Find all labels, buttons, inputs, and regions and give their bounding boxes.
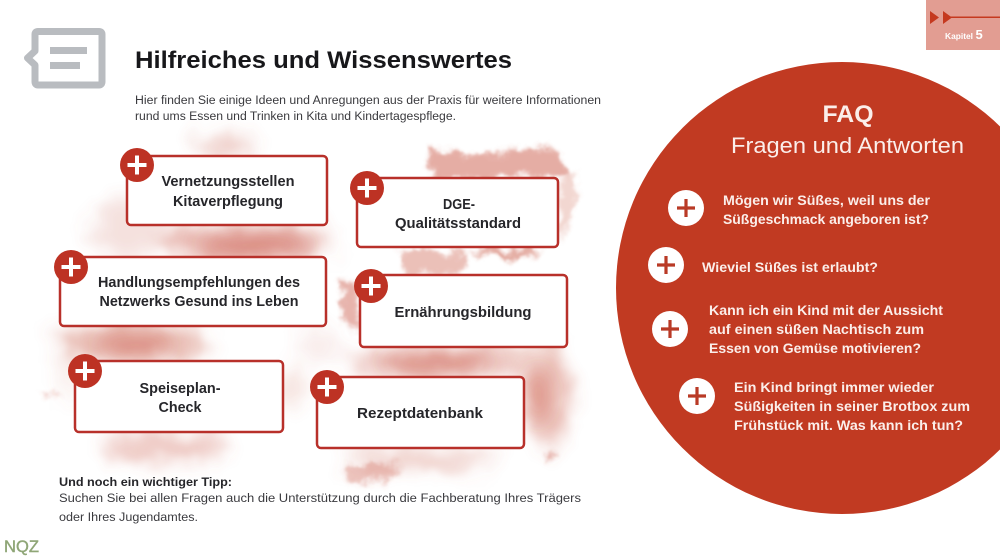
card: Speiseplan-Check: Speiseplan- xyxy=(140,381,221,397)
intro text: rund ums Essen und Trinken in Kita und Kindertagespflege. xyxy=(135,109,456,123)
question 3 xyxy=(652,302,943,356)
card: Ernährungsbildung: Ernährungsbildung xyxy=(394,305,532,321)
question 3: auf einen süßen Nachtisch zum xyxy=(709,321,924,337)
question 1 xyxy=(668,190,931,227)
question 3: Essen von Gemüse motivieren? xyxy=(709,340,921,356)
card: Speiseplan-Check: Check xyxy=(158,400,202,416)
card: DGE-Qualitätsstandard: Qualitätsstandard xyxy=(395,216,521,232)
card: Rezeptdatenbank: Rezeptdatenbank xyxy=(357,406,484,422)
tip text: Und noch ein wichtiger Tipp: xyxy=(59,475,232,489)
question 4: Ein Kind bringt immer wieder xyxy=(734,379,935,395)
tip text xyxy=(59,475,581,524)
tip text: Suchen Sie bei allen Fragen auch die Unterstützung durch die Fachberatung Ihres Trägers xyxy=(59,491,581,505)
card: Rezeptdatenbank xyxy=(310,370,524,448)
card: Vernetzungsstellen Kitaverpflegung xyxy=(120,148,327,225)
FAQ heading: FAQ xyxy=(822,101,874,128)
question 1: Mögen wir Süßes, weil uns der xyxy=(723,192,931,208)
card: DGE-Qualitätsstandard xyxy=(350,171,558,247)
card: Handlungsempfehlungen: Handlungsempfehlungen des xyxy=(98,275,300,291)
question 4: Frühstück mit. Was kann ich tun? xyxy=(734,417,963,433)
card: Vernetzungsstellen Kitaverpflegung: Vernetzungsstellen xyxy=(162,174,294,190)
panel: FAQ circle xyxy=(616,62,1000,514)
card: Handlungsempfehlungen xyxy=(54,250,326,326)
icon: speech bubble xyxy=(28,32,102,85)
chapter tab xyxy=(926,0,1000,50)
title: Hilfreiches und Wissenswertes xyxy=(135,47,512,74)
question 1: Süßgeschmack angeboren ist? xyxy=(723,211,929,227)
tip text: oder Ihres Jugendamtes. xyxy=(59,510,198,524)
question 2: Wieviel Süßes ist erlaubt? xyxy=(702,259,878,275)
card: DGE-Qualitätsstandard: DGE- xyxy=(443,197,475,213)
intro text: Hier finden Sie einige Ideen und Anregungen aus der Praxis für weitere Informationen xyxy=(135,93,601,107)
card: Ernährungsbildung xyxy=(354,269,567,347)
question 4 xyxy=(679,378,970,433)
intro text xyxy=(135,93,601,123)
card: Handlungsempfehlungen: Netzwerks Gesund ins Leben xyxy=(100,294,298,310)
chapter tab: Kapitel xyxy=(945,32,973,41)
chapter tab: 5 xyxy=(976,27,983,42)
FAQ subheading: Fragen und Antworten xyxy=(731,133,964,158)
question 2 xyxy=(648,247,878,283)
question 4: Süßigkeiten in seiner Brotbox zum xyxy=(734,398,970,414)
logo: NOZ: NQZ xyxy=(4,537,39,556)
card: Vernetzungsstellen Kitaverpflegung: Kitaverpflegung xyxy=(173,194,283,210)
watercolor splash background xyxy=(44,136,578,484)
card: Speiseplan-Check xyxy=(68,354,283,432)
question 3: Kann ich ein Kind mit der Aussicht xyxy=(709,302,943,318)
